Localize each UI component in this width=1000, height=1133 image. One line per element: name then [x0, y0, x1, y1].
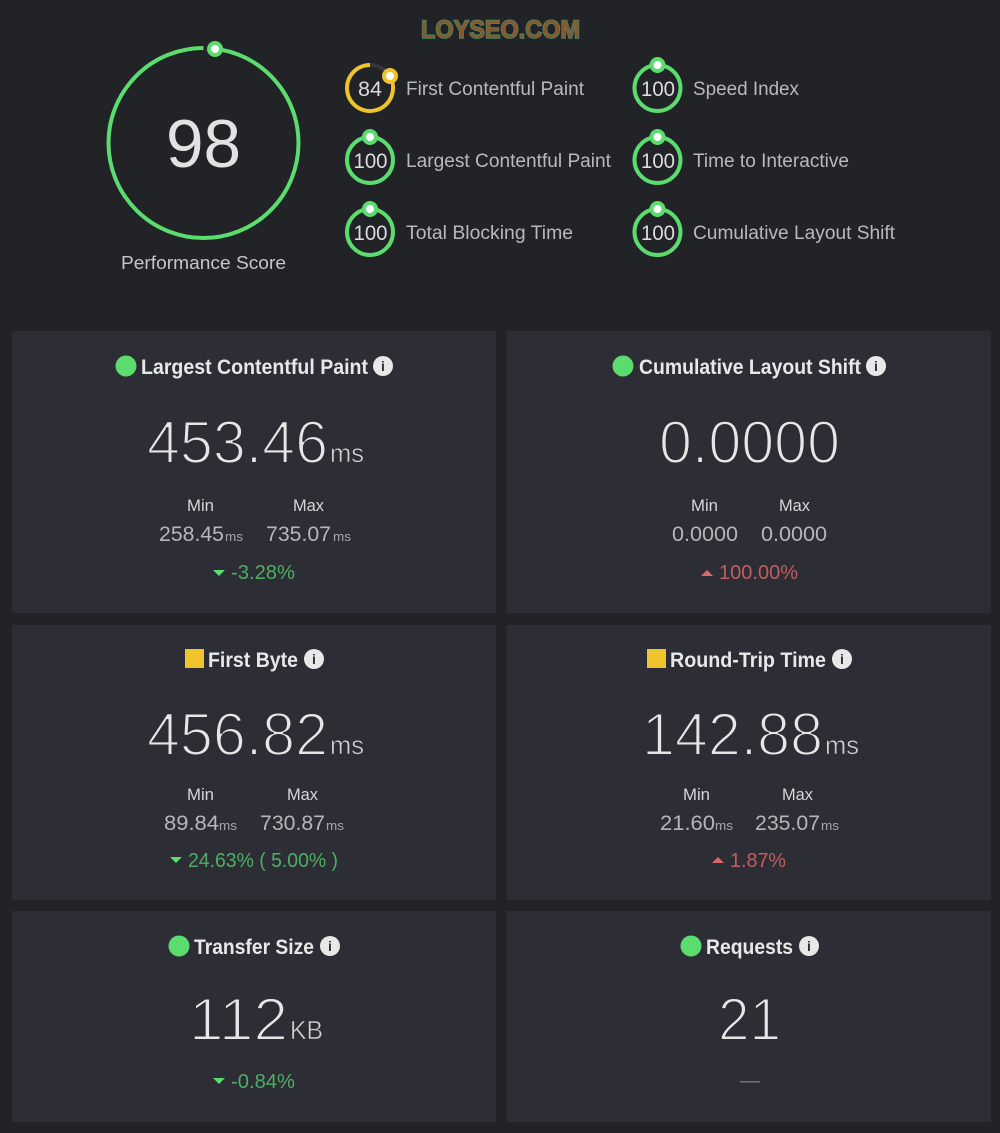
metric: Largest Contentful Paint — [347, 129, 612, 183]
panel: Round-Trip Time: ms — [821, 818, 840, 833]
panel: Requests: — — [740, 1070, 760, 1092]
panel: Round-Trip Time: 142.88 — [642, 701, 823, 768]
panel: Round-Trip Time: 1.87% — [730, 850, 786, 872]
metric: Total Blocking Time — [347, 201, 573, 255]
panel: Cumulative Layout Shift — [507, 331, 991, 613]
panel: Largest Contentful Paint: Min — [187, 497, 214, 515]
panel: Round-Trip Time: Round-Trip Time — [670, 649, 826, 672]
panel: First Byte: ms — [219, 818, 238, 833]
panel: Round-Trip Time: ms — [715, 818, 734, 833]
panel: First Byte — [12, 625, 496, 900]
metric: Total Blocking Time: 100 — [354, 222, 388, 245]
panel: Round-Trip Time — [507, 625, 991, 900]
metric: First Contentful Paint — [347, 65, 585, 111]
panel: Transfer Size: 112 — [189, 986, 288, 1053]
panel: First Byte: Max — [287, 786, 319, 804]
panel: First Byte: First Byte — [208, 649, 298, 672]
panel: Round-Trip Time: 21.60 — [660, 812, 715, 835]
panel: Largest Contentful Paint: 453.46 — [147, 409, 328, 476]
metric: Cumulative Layout Shift: 100 — [641, 222, 675, 245]
metric: Speed Index: Speed Index — [693, 79, 799, 100]
metric: Time to Interactive: Time to Interactive — [693, 151, 849, 172]
panel: First Byte: 89.84 — [164, 812, 219, 835]
panel: Largest Contentful Paint: ms — [225, 529, 244, 544]
panel: Round-Trip Time: ms — [825, 730, 859, 760]
metric: Speed Index — [634, 57, 799, 111]
panel: Largest Contentful Paint: 258.45 — [159, 523, 224, 546]
panel: Round-Trip Time: Min — [683, 786, 710, 804]
panel: Round-Trip Time: i — [840, 651, 844, 667]
performance score gauge — [108, 41, 298, 273]
panel: Transfer Size: -0.84% — [231, 1071, 295, 1093]
panel: Cumulative Layout Shift: 0.0000 — [672, 523, 738, 546]
panel: Cumulative Layout Shift: Cumulative Layout Shift — [639, 356, 861, 379]
panel: Requests: i — [807, 938, 811, 954]
panel: Cumulative Layout Shift: 0.0000 — [761, 523, 827, 546]
panel: Largest Contentful Paint: Largest Contentful Paint — [141, 356, 368, 379]
metric: Total Blocking Time: Total Blocking Time — [406, 223, 573, 244]
panel: Requests — [507, 911, 991, 1122]
panel: Cumulative Layout Shift: Max — [779, 497, 811, 515]
watermark: LOYSEO.COM — [421, 16, 580, 44]
panel: First Byte: 24.63% ( 5.00% ) — [188, 850, 338, 872]
panel: Transfer Size: Transfer Size — [194, 936, 314, 959]
panel: First Byte: 456.82 — [147, 701, 328, 768]
metric: Largest Contentful Paint: 100 — [354, 150, 388, 173]
metric: First Contentful Paint: First Contentful Paint — [406, 79, 585, 100]
panel: First Byte: 730.87 — [260, 812, 325, 835]
metric: Cumulative Layout Shift: Cumulative Layout Shift — [693, 223, 896, 244]
panel: Requests: Requests — [706, 936, 793, 959]
metric: Time to Interactive — [634, 129, 849, 183]
panel: Cumulative Layout Shift: 0.0000 — [659, 409, 840, 476]
panel: Cumulative Layout Shift: 100.00% — [719, 562, 798, 584]
panel: First Byte: ms — [326, 818, 345, 833]
panel: First Byte: i — [312, 651, 316, 667]
performance score gauge: 98 — [166, 106, 241, 182]
panel: First Byte: Min — [187, 786, 214, 804]
panel: Requests: 21 — [718, 986, 781, 1053]
panel: First Byte: ms — [330, 730, 364, 760]
panel: Largest Contentful Paint: 735.07 — [266, 523, 331, 546]
panel: Cumulative Layout Shift: Min — [691, 497, 718, 515]
panel: Largest Contentful Paint: ms — [333, 529, 352, 544]
panel: Largest Contentful Paint: Max — [293, 497, 325, 515]
metric: Speed Index: 100 — [641, 78, 675, 101]
panel: Largest Contentful Paint: -3.28% — [231, 562, 295, 584]
panel: Transfer Size: i — [328, 938, 332, 954]
panel: Largest Contentful Paint — [12, 331, 496, 613]
metric: Largest Contentful Paint: Largest Contentful Paint — [406, 151, 612, 172]
panel: Transfer Size — [12, 911, 496, 1122]
panel: Transfer Size: KB — [290, 1015, 323, 1045]
metric: Cumulative Layout Shift — [634, 201, 896, 255]
metric: First Contentful Paint: 84 — [358, 78, 382, 101]
panel: Largest Contentful Paint: ms — [330, 438, 364, 468]
performance score gauge: Performance Score — [121, 253, 286, 273]
panel: Round-Trip Time: 235.07 — [755, 812, 820, 835]
panel: Cumulative Layout Shift: i — [874, 358, 878, 374]
panel: Round-Trip Time: Max — [782, 786, 814, 804]
metric: Time to Interactive: 100 — [641, 150, 675, 173]
panel: Largest Contentful Paint: i — [381, 358, 385, 374]
